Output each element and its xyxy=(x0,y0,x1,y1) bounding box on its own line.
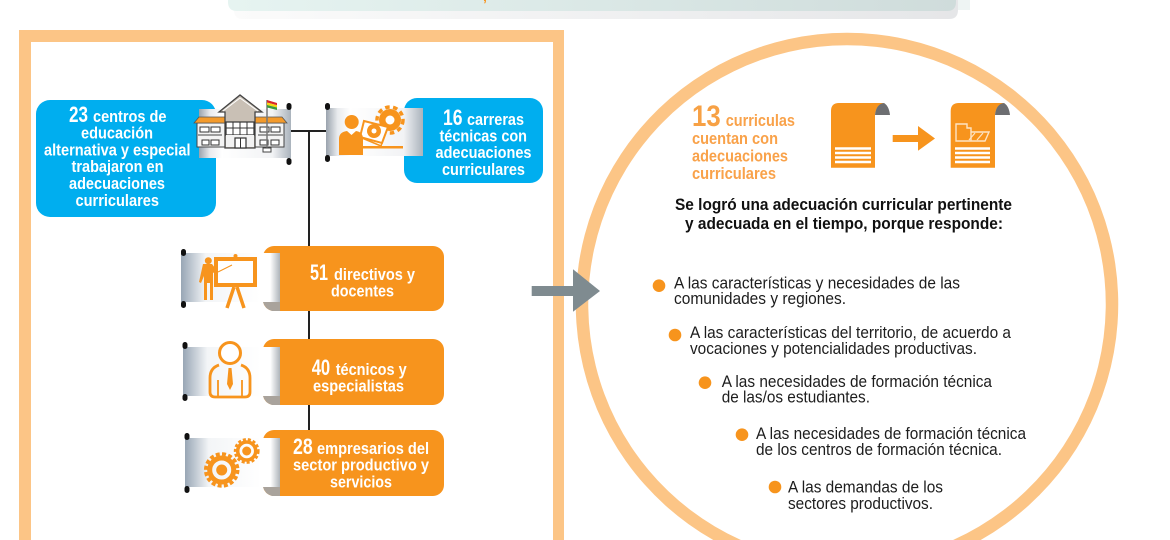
icon: person with tie xyxy=(210,342,250,397)
text: 16 carreras técnicas xyxy=(436,105,532,179)
list item 5: sectores productivos. xyxy=(788,494,933,513)
text: 13 curriculas: curriculas xyxy=(726,112,795,130)
list item 3: de las/os estudiantes. xyxy=(722,388,870,407)
text: 13 curriculas: cuentan con xyxy=(692,130,778,148)
text: 23 centros de educación: 23 xyxy=(69,102,88,127)
text: 28 empresarios: 28 xyxy=(293,434,313,459)
list item 2 xyxy=(669,323,1011,358)
arrow: between panels xyxy=(532,269,600,312)
icon: gears xyxy=(206,440,258,486)
list item 5 xyxy=(769,478,943,513)
text: 13 curriculas: curriculares xyxy=(692,165,776,183)
text: 28 empresarios xyxy=(293,434,430,492)
text: 16 carreras técnicas: curriculares xyxy=(442,161,525,179)
panel: circle outline xyxy=(576,33,1118,540)
text: 40 tecnicos y especialistas: especialistas xyxy=(313,378,404,396)
scroll banner left xyxy=(199,103,292,165)
panel: left frame xyxy=(19,30,564,540)
panel: 16 carreras xyxy=(325,98,543,183)
text: 51 directivos y docentes: 51 xyxy=(310,260,328,285)
text: 23 centros de educación: trabajaron en xyxy=(72,158,164,176)
panel: 23 centros xyxy=(36,95,292,217)
icon: school building xyxy=(194,95,287,152)
text: 13 curriculas: 13 xyxy=(692,100,721,133)
scroll banner right xyxy=(325,103,423,162)
icon: document before xyxy=(831,103,890,168)
panel: 40 tecnicos xyxy=(182,339,444,405)
text: 40 tecnicos y especialistas: 40 xyxy=(312,355,330,380)
text: 23 centros de educación: educación xyxy=(81,124,153,142)
list item 3 xyxy=(699,372,992,407)
heading: circle statement: y adecuada en el tiempo, porque responde: xyxy=(685,215,1003,233)
text: 28 empresarios: sector productivo y xyxy=(293,456,430,474)
list item 1: comunidades y regiones. xyxy=(674,289,846,308)
text: 13 curriculas: adecuaciones xyxy=(692,148,788,166)
list item 2: vocaciones y potencialidades productivas. xyxy=(690,339,977,358)
text: 51 directivos y docentes xyxy=(310,260,416,301)
arrow: document transformation xyxy=(893,126,935,151)
text: 51 directivos y docentes: directivos y xyxy=(334,266,416,284)
list item 5: A las demandas de los xyxy=(788,478,943,497)
list item 3: A las necesidades de formación técnica xyxy=(722,372,992,391)
text: 23 centros de educación xyxy=(44,102,190,210)
text: 23 centros de educación: curriculares xyxy=(76,192,159,210)
text: 16 carreras técnicas: carreras xyxy=(467,111,524,129)
text: 23 centros de educación: centros de xyxy=(93,108,166,126)
heading: circle statement: Se logró una adecuación curricular pertinente xyxy=(675,196,1012,214)
text: 13 curriculas xyxy=(692,100,795,183)
text: 28 empresarios: servicios xyxy=(330,474,392,492)
panel: 28 empresarios xyxy=(184,430,444,496)
list item 1 xyxy=(653,274,960,308)
text: 16 carreras técnicas: técnicas con xyxy=(440,128,527,146)
text: 16 carreras técnicas: 16 xyxy=(443,105,462,130)
icon: person with cards and gear xyxy=(339,107,403,155)
connector lines xyxy=(291,131,326,430)
text: 51 directivos y docentes: docentes xyxy=(331,283,394,301)
list item 2: A las características del territorio, de acuerdo a xyxy=(690,323,1011,342)
panel: 51 directivos xyxy=(181,246,444,311)
heading: circle statement xyxy=(675,196,1012,233)
text: 28 empresarios: empresarios del xyxy=(317,440,429,458)
text: 16 carreras técnicas: adecuaciones xyxy=(436,144,532,162)
list item 1: A las características y necesidades de las xyxy=(674,274,960,293)
text: 23 centros de educación: alternativa y especial xyxy=(44,142,190,160)
list item 4 xyxy=(736,424,1026,459)
icon: document after xyxy=(951,103,1010,168)
list item 4: A las necesidades de formación técnica xyxy=(756,424,1026,443)
icon: presenter at board xyxy=(199,254,255,308)
text: 23 centros de educación: adecuaciones xyxy=(69,175,165,193)
text: 40 tecnicos y especialistas: técnicos y xyxy=(336,361,407,379)
top banner xyxy=(228,0,970,19)
text: 40 tecnicos y especialistas xyxy=(312,355,407,396)
list item 4: de los centros de formación técnica. xyxy=(756,440,1002,459)
